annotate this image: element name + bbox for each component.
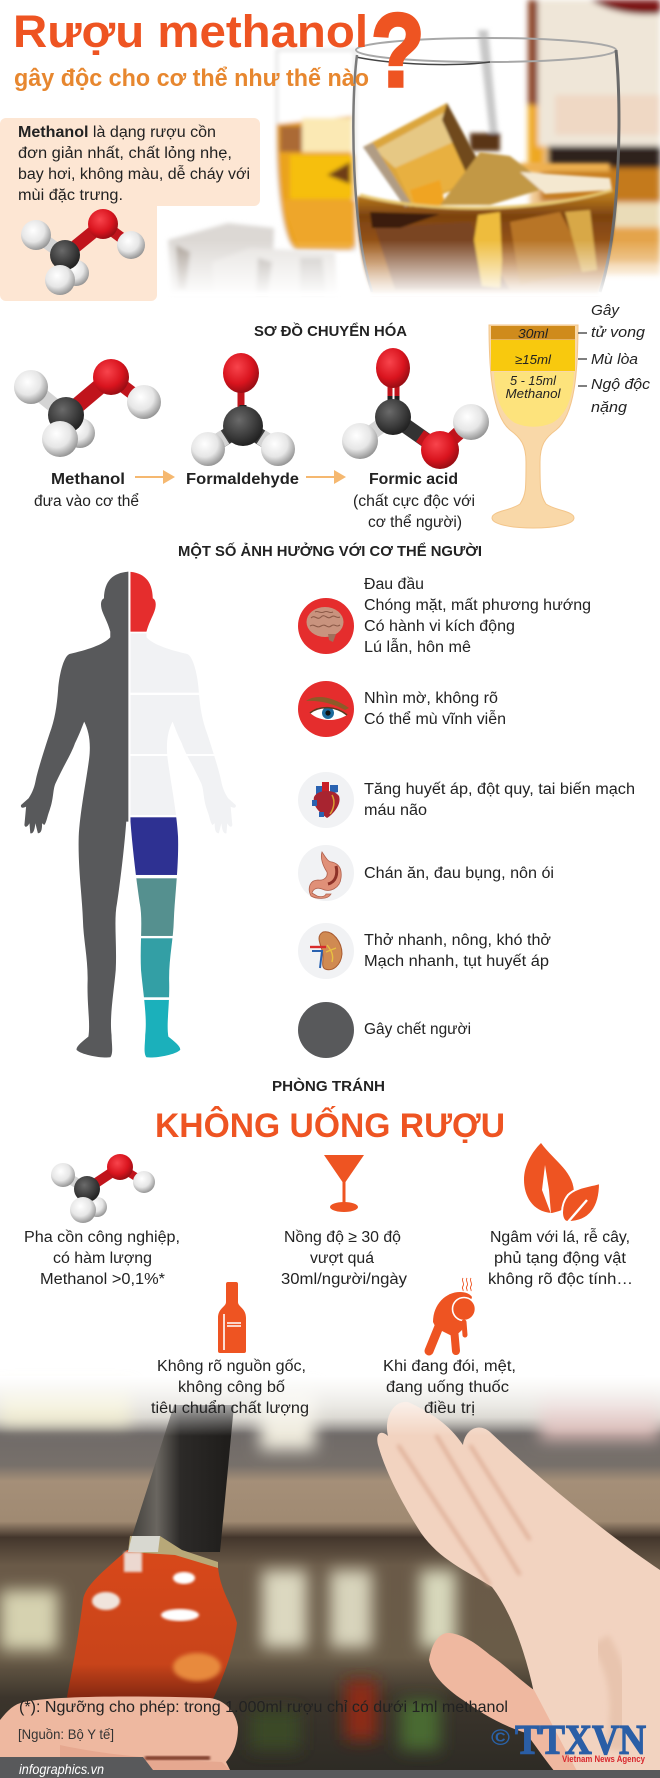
text: Pha cồn công nghiệp, [24,1229,180,1246]
text [24,1229,180,1288]
goblet chart: methanol doses [489,302,651,528]
definition text: Methanol là dạng rượu cồn [18,124,216,141]
icon: kidney organ [298,923,354,979]
text: phủ tạng động vật [494,1250,627,1267]
text: breathing effects: Mạch nhanh, tụt huyết áp [364,953,549,970]
dose labels: 30ml [518,326,549,341]
text [151,1358,309,1417]
formic acid molecule [342,348,489,469]
effect labels with leader lines [578,302,651,416]
text: brain effects: Chóng mặt, mất phương hướng [364,597,591,614]
prevention: alcohol concentration [281,1155,407,1288]
label: methanol [34,471,139,510]
label: formaldehyde: Formaldehyde [186,471,299,488]
icon: brain [298,598,354,654]
effect labels with leader lines: nặng [591,399,628,416]
text: có hàm lượng [53,1250,152,1267]
ice cubes [168,223,337,293]
text: heart effects: máu não [364,802,427,819]
metabolism diagram [14,348,489,531]
effect: heart [298,772,635,828]
footer bar [0,1757,660,1778]
text: breathing effects: Thở nhanh, nông, khó thở [364,932,551,949]
rear glass [277,30,610,250]
effect: stomach [298,845,554,901]
text [281,1229,407,1288]
text: vượt quá [310,1250,374,1267]
text: heart effects [364,781,635,819]
text: 30ml/người/ngày [281,1271,407,1288]
definition text: mùi đặc trưng. [18,187,123,204]
text: breathing effects [364,932,551,970]
effect labels with leader lines: Mù lòa [591,351,638,368]
icon: bottle [218,1282,246,1353]
label: formic acid [353,471,475,531]
bottom photo: bottle and refusing hand [0,1376,660,1778]
effect: death [298,1002,471,1058]
label: methanol: Methanol [51,471,125,488]
text: brain effects [364,576,591,656]
definition text [18,124,250,204]
dose labels: 5 - 15ml [510,373,557,388]
body figure [21,567,257,1060]
icon: martini glass [324,1155,364,1212]
blurred shelf background [0,1377,660,1778]
formaldehyde molecule [191,353,295,466]
text: eye effects: Nhìn mờ, không rõ [364,690,498,707]
prevention: unknown origin [151,1282,309,1417]
goblet outline [489,325,578,528]
effect labels with leader lines: Gây [591,302,621,319]
band: pale yellow 5-15ml [494,372,574,427]
front glass with whisky and ice [353,38,619,294]
refusing hand [377,1402,660,1778]
methanol molecule [14,359,161,457]
source: [Nguồn: Bộ Y tế] [18,1726,114,1742]
definition text: bay hơi, không màu, dễ cháy với [18,166,250,183]
text: điều trị [424,1400,475,1417]
footer site name: infographics.vn [19,1761,104,1777]
text: brain effects: Lú lẫn, hôn mê [364,639,471,656]
prevention: hungry or tired [383,1278,516,1417]
effect: eye [298,681,506,737]
text: Khi đang đói, mệt, [383,1358,516,1375]
bottle background [528,0,660,275]
subtitle: gây độc cho cơ thể như thế nào [14,65,369,92]
effect: brain [298,576,591,656]
footnote: (*): Ngưỡng cho phép: trong 1.000ml rượu chỉ có dưới 1ml methanol [19,1699,508,1716]
arrow: methanol to formaldehyde [135,470,175,484]
text: stomach effects: Chán ăn, đau bụng, nôn ói [364,865,554,882]
text: tiêu chuẩn chất lượng [151,1400,309,1417]
icon: leaves [524,1143,600,1222]
dose labels [506,326,562,401]
heading: prevention: PHÒNG TRÁNH [272,1077,385,1095]
text: brain effects: Đau đầu [364,576,424,593]
label: formic acid: Formic acid [369,471,458,488]
dose labels: Methanol [506,386,562,401]
effect: lungs and pulse [298,923,551,979]
title: Rượu methanol [13,6,368,57]
label: formic acid: (chất cực độc với [353,493,475,510]
effect labels with leader lines: tử vong [591,324,646,341]
text: Ngâm với lá, rễ cây, [490,1229,630,1246]
panel background [0,118,260,301]
text: không công bố [178,1379,285,1396]
text [488,1229,633,1288]
text: eye effects [364,690,506,728]
text [383,1358,516,1417]
text: đang uống thuốc [386,1379,509,1396]
text: không rõ độc tính… [488,1271,633,1288]
dose labels: ≥15ml [515,352,552,367]
icon: grey circle [298,1002,354,1058]
label: methanol: đưa vào cơ thể [34,493,139,510]
right half colour zones [130,572,236,1058]
header photo: whisky glasses and bottle [150,0,660,296]
logo: TTXVN: © [491,1725,510,1750]
effect labels with leader lines: Ngộ độc [591,376,651,393]
band: gold 15ml [491,340,575,371]
arrow: formaldehyde to formic acid [306,470,346,484]
prevention: herbal infusion [488,1143,633,1288]
heading: do not drink: KHÔNG UỐNG RƯỢU [155,1106,505,1145]
heading: metabolism diagram: SƠ ĐỒ CHUYỂN HÓA [254,322,407,340]
icon: methanol molecule [51,1154,155,1223]
text: eye effects: Có thể mù vĩnh viễn [364,711,506,728]
text: brain effects: Có hành vi kích động [364,618,515,635]
bottle [0,1405,238,1770]
icon: eye [298,681,354,737]
top fade of the photo [0,1376,660,1436]
hand holding the bottle [0,1697,238,1770]
panel: methanol definition [0,118,260,301]
text: Nồng độ ≥ 30 độ [284,1229,401,1246]
definition text: đơn giản nhất, chất lỏng nhẹ, [18,145,232,162]
white fade under the photo [150,240,660,296]
icon: stomach [298,845,354,901]
heading: effects on the body: MỘT SỐ ẢNH HƯỞNG VỚI CƠ THỂ NGƯỜI [178,542,482,560]
icon: tired person [429,1278,476,1351]
logo: TTXVN: Vietnam News Agency [562,1754,645,1764]
band: brown 30ml [491,326,575,340]
text: heart effects: Tăng huyết áp, đột quy, tai biến mạch [364,781,635,798]
icon: heart [298,772,354,828]
label: formic acid: cơ thể người) [368,514,462,531]
prevention: industrial alcohol [24,1154,180,1288]
icon: small methanol molecule [21,209,145,295]
logo: TTXVN: TTXVN [515,1718,646,1764]
text: Không rõ nguồn gốc, [157,1358,306,1375]
left half silhouette [21,572,128,1057]
text: death: Gây chết người [364,1021,471,1038]
text: Methanol >0,1%* [40,1271,165,1288]
